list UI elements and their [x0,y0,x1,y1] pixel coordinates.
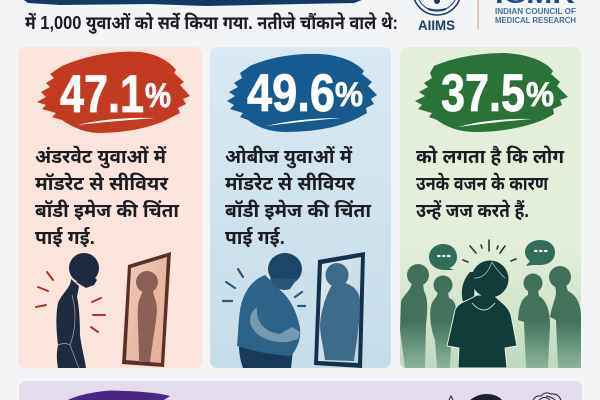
title brush [24,0,362,6]
stat: 37.5%: 37.5 [441,64,525,123]
panel: underweight [18,47,202,368]
text block [35,145,179,249]
text block: मॉडरेट से सीवियर [35,172,169,195]
text block: मॉडरेट से सीवियर [225,172,356,195]
icon: overweight person and mirror [223,252,365,368]
icon: AIIMS emblem [413,0,461,15]
stat: 49.6%: % [335,76,363,114]
speech bubbles [429,244,457,270]
stat: 49.6% [227,54,377,132]
mirror [122,252,171,367]
text block: बॉडी इमेज की चिंता [35,199,179,222]
panel: judged [400,47,581,368]
icon: judged person in crowd [400,240,581,368]
icon: hair strand [449,396,453,400]
panel: obese [210,47,391,368]
text block: ओबीज युवाओं में [225,145,353,169]
logo: ICMR: MEDICAL RESEARCH [495,15,576,25]
stat: 37.5% [415,53,568,132]
main figure [462,272,475,302]
text block [416,145,565,222]
stat: 49.6%: 49.6 [247,64,335,123]
text block: पाई गई. [225,226,285,249]
text block: पाई गई. [35,226,95,249]
logo: AIIMS [413,0,461,33]
stat: 47.1%: % [145,77,171,115]
icon: thin person and mirror [36,252,171,368]
AIIMS label: AIIMS [418,17,455,33]
text block [225,145,371,249]
text block: उन्हें जज करते हैं. [416,199,529,222]
emphasis rays [463,240,516,262]
text block: अंडरवेट युवाओं में [35,145,167,169]
stat: 47.1% [37,52,190,133]
intro text: में 1,000 युवाओं को सर्वे किया गया. नतीजे चौंकाने वाले थे: [25,12,398,34]
mirror [314,252,365,368]
text block: बॉडी इमेज की चिंता [225,199,371,222]
ICMR full name: INDIAN COUNCIL OF [495,6,576,16]
panel: bottom [19,381,582,400]
brush: bottom stat [68,390,170,400]
icon: scribble thought [533,393,561,400]
text block: को लगता है कि लोग [416,145,565,168]
stat: 47.1%: 47.1 [60,65,144,124]
crowd silhouettes [400,264,581,368]
header [24,0,398,34]
text block: उनके वजन के कारण [416,172,549,195]
logo: ICMR [478,0,576,29]
stat: 37.5%: % [526,76,554,114]
icon: head silhouette [470,394,502,400]
